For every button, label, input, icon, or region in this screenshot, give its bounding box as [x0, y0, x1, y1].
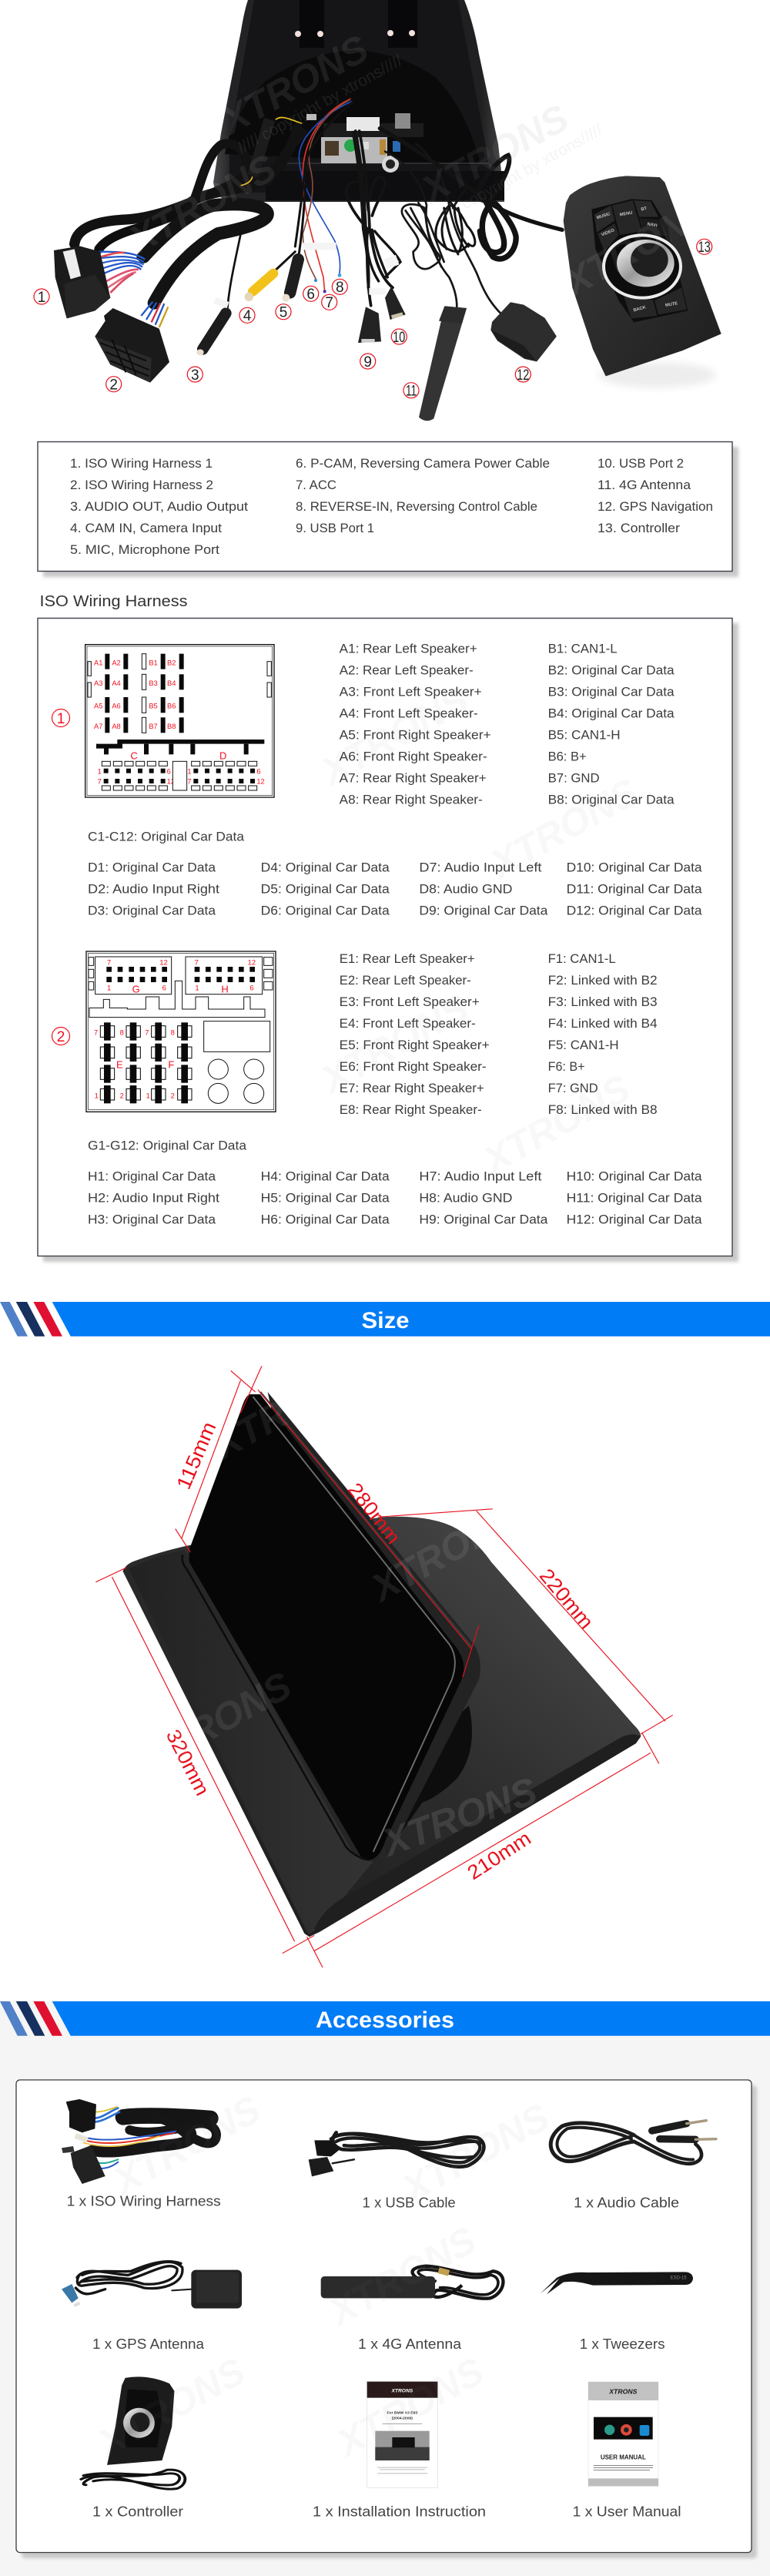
item: GPS antenna: [62, 2262, 242, 2352]
item: ISO wiring harness: [62, 2099, 221, 2209]
antennas, controller (right half): [380, 129, 721, 421]
diagram: connector 1 pinout: B6: [167, 702, 176, 709]
label: ISO wiring harness: 1 x ISO Wiring Harness: [67, 2194, 221, 2209]
pin list: D1-D12: D2: Audio Input Right: [88, 881, 219, 897]
diagram: connector 1 pinout: B7: [149, 723, 158, 730]
watermarks on pin panel: [313, 678, 645, 1183]
colored wires connector 2: [141, 302, 168, 327]
diagram: connector 2 pinout: 7: [145, 1028, 149, 1036]
panel: numbered parts list: [38, 442, 738, 577]
diagram: connector 2 pinout: 7: [94, 1028, 98, 1036]
pin list: D1-D12: D8: Audio GND: [419, 881, 512, 897]
pin list: H1-H12: H10: Original Car Data: [567, 1169, 702, 1183]
pin list: E1-E8: E7: Rear Right Speaker+: [340, 1081, 484, 1095]
pin list: G1-G12: G1-G12: Original Car Data: [88, 1139, 247, 1152]
pin list: F1-F8: [548, 951, 658, 1117]
panel: accessories: [16, 2080, 757, 2558]
watermarks on product photo: XTRONS: [120, 146, 283, 263]
pin list: F1-F8: F8: Linked with B8: [548, 1102, 658, 1117]
pin list: H1-H12: H2: Audio Input Right: [88, 1191, 219, 1206]
list column 2: 7. ACC: [296, 478, 336, 492]
size photo watermarks: [136, 1352, 543, 1865]
diagram: connector 1 pinout: B1: [149, 659, 158, 666]
diagram: connector 2 pinout: H: [221, 983, 229, 995]
item: installation instruction: [313, 2382, 486, 2520]
diagram: connector 1 pinout: 6: [167, 767, 171, 775]
label: user manual: 1 x User Manual: [573, 2504, 681, 2520]
pin list: C1-C12: C1-C12: Original Car Data: [88, 829, 245, 844]
watermarks on product photo: ///// copyright by xtrons/////: [235, 52, 405, 157]
pin list: D1-D12: D7: Audio Input Left: [419, 860, 542, 874]
list column 2: 9. USB Port 1: [296, 521, 374, 535]
stand and screen: [122, 1392, 641, 1937]
watermarks on accessories panel: XTRONS: [328, 2350, 491, 2466]
pin list: E1-E8: E5: Front Right Speaker+: [340, 1038, 490, 1052]
diagram: connector 1 pinout: A6: [112, 702, 121, 709]
pin list: D1-D12: D1: Original Car Data: [88, 860, 216, 874]
list column 3: 12. GPS Navigation: [598, 499, 713, 514]
pin list: H1-H12: H1: Original Car Data: [88, 1169, 216, 1183]
connector 1: [54, 246, 110, 318]
pin list: B1-B8: B7: GND: [548, 771, 600, 786]
list column 3: [598, 456, 713, 535]
pin list: F1-F8: F3: Linked with B3: [548, 995, 658, 1009]
pin list: B1-B8: B6: B+: [548, 750, 587, 764]
diagram: connector 2 pinout: [86, 951, 276, 1112]
pin list: A1-A8: A2: Rear Left Speaker-: [340, 663, 474, 678]
pin list: A1-A8: A7: Rear Right Speaker+: [340, 771, 487, 786]
callout: connector 2: [52, 1028, 69, 1045]
item: 4G antenna: [321, 2266, 503, 2352]
pin list: B1-B8: B1: CAN1-L: [548, 642, 618, 656]
item: user manual: XTRONS: [608, 2388, 638, 2396]
pin list: A1-A8: A3: Front Left Speaker+: [340, 685, 482, 699]
diagram: connector 1 pinout: B3: [149, 679, 158, 687]
watermarks on product photo: [120, 15, 718, 305]
pin list: D1-D12: D11: Original Car Data: [567, 881, 702, 897]
diagram: connector 1 pinout: B4: [167, 679, 176, 687]
watermarks on accessories panel: XTRONS: [393, 2095, 557, 2212]
pin list: H1-H12: H5: Original Car Data: [261, 1191, 390, 1206]
list column 2: [296, 456, 550, 535]
number labels: 5: [280, 305, 287, 320]
pin list: F1-F8: F1: CAN1-L: [548, 951, 616, 966]
pin list: B1-B8: B2: Original Car Data: [548, 663, 675, 678]
USB cables: [346, 131, 400, 306]
pin list: B1-B8: B8: Original Car Data: [548, 793, 675, 807]
number labels: [38, 240, 711, 399]
list column 2: 8. REVERSE-IN, Reversing Control Cable: [296, 499, 537, 514]
diagram: connector 1 pinout: B8: [167, 723, 176, 730]
number labels: 1: [38, 290, 45, 306]
watermarks on product photo: ///// copyright by xtrons/////: [435, 121, 605, 226]
item: user manual: [573, 2382, 681, 2520]
pin list: H1-H12: H9: Original Car Data: [419, 1213, 548, 1227]
diagram: connector 2 pinout: 8: [171, 1028, 175, 1036]
watermarks on accessories panel: XTRONS: [89, 2350, 253, 2466]
section banner: Size: Size: [362, 1308, 410, 1333]
page background: accessories light-gray section: [0, 2001, 770, 2576]
pin list: E1-E8: E8: Rear Right Speaker-: [340, 1102, 482, 1117]
diagram: connector 1 pinout: C: [130, 750, 138, 762]
watermarks on accessories panel: [89, 2088, 557, 2466]
pin list: E1-E8: E3: Front Left Speaker+: [340, 995, 480, 1009]
pin list: D1-D12: D12: Original Car Data: [567, 904, 702, 918]
diagram: connector 2 pinout: 1: [195, 984, 199, 992]
pin list: B1-B8: [548, 642, 675, 807]
number labels: 8: [336, 280, 344, 296]
antennas, controller (right half): BACK: [633, 305, 647, 313]
pin list: A1-A8: A5: Front Right Speaker+: [340, 728, 491, 743]
head unit back: [213, 0, 504, 202]
size photo watermarks: XTRONS: [375, 1769, 543, 1865]
label: audio cable: 1 x Audio Cable: [574, 2195, 679, 2211]
diagram: connector 2 pinout: 1: [146, 1092, 150, 1100]
size photo watermarks: XTRONS: [136, 1664, 299, 1780]
pin list: D1-D12: D9: Original Car Data: [419, 904, 548, 918]
label: 4G antenna: 1 x 4G Antenna: [358, 2336, 462, 2352]
pin list: A1-A8: A1: Rear Left Speaker+: [340, 642, 477, 656]
diagram: connector 1 pinout: 1: [98, 767, 102, 775]
list column 3: 11. 4G Antenna: [598, 478, 691, 492]
diagram: connector 2 pinout: E: [116, 1059, 123, 1071]
item: installation instruction: XTRONS: [390, 2389, 413, 2394]
audio jack: [203, 231, 241, 349]
controller body: [564, 176, 721, 376]
list column 3: 13. Controller: [598, 521, 680, 535]
pin list: E1-E8: E1: Rear Left Speaker+: [340, 951, 475, 966]
item: tweezers: ESD-15: [671, 2276, 687, 2281]
diagram: connector 1 pinout: A3: [94, 679, 102, 687]
pin list: E1-E8: E2: Rear Left Speaker-: [340, 973, 471, 988]
diagram: connector 1 pinout: A7: [94, 723, 102, 730]
dimension labels: 210mm: [463, 1826, 535, 1884]
section banner: Size: [0, 1302, 770, 1337]
dimension labels: 115mm: [172, 1418, 220, 1493]
pin list: B1-B8: B3: Original Car Data: [548, 685, 675, 699]
pin list: B1-B8: B4: Original Car Data: [548, 706, 675, 721]
dimension labels: 320mm: [162, 1726, 214, 1800]
pin list: F1-F8: F7: GND: [548, 1081, 598, 1095]
list column 1: 1. ISO Wiring Harness 1: [70, 456, 213, 471]
pin list: A1-A8: A8: Rear Right Speaker-: [340, 793, 483, 807]
watermarks on accessories panel: XTRONS: [105, 2088, 268, 2204]
section banner: Accessories: [0, 2001, 770, 2036]
diagram: connector 2 pinout: 6: [249, 984, 254, 992]
watermarks on pin panel: XTRONS: [482, 770, 645, 887]
diagram: connector 1 pinout: 7: [187, 777, 192, 785]
list column 3: 10. USB Port 2: [598, 456, 684, 471]
diagram: connector 2 pinout: F: [168, 1059, 174, 1071]
item: USB cable: [309, 2132, 484, 2211]
list column 1: 3. AUDIO OUT, Audio Output: [70, 499, 248, 514]
dimension labels: 220mm: [535, 1564, 598, 1633]
diagram: connector 1 pinout: [85, 645, 274, 797]
number labels: 2: [109, 377, 118, 393]
diagram: connector 1 pinout: 12: [256, 777, 265, 785]
item: installation instruction: For BMW X3 E83: [387, 2410, 417, 2415]
antennas, controller (right half): NAVI: [647, 222, 658, 229]
diagram: connector 2 pinout: 2: [120, 1092, 124, 1100]
diagram: connector 2 pinout: 12: [248, 959, 256, 967]
pin list: F1-F8: F6: B+: [548, 1059, 585, 1074]
pin list: D1-D12: D6: Original Car Data: [261, 904, 390, 918]
diagram: connector 1 pinout: A8: [112, 723, 121, 730]
pin list: A1-A8: [340, 642, 491, 807]
label: USB cable: 1 x USB Cable: [363, 2195, 456, 2211]
pin list: H1-H12: H3: Original Car Data: [88, 1213, 216, 1227]
number labels: 9: [363, 354, 372, 371]
item: controller: [81, 2376, 185, 2520]
diagram: connector 1 pinout: A1: [94, 659, 102, 666]
harness, wires and connectors (left half): [54, 99, 406, 383]
number labels: 11: [406, 384, 417, 399]
pin list: H1-H12: H7: Audio Input Left: [419, 1169, 542, 1183]
heading: ISO Wiring Harness: ISO Wiring Harness: [40, 593, 188, 610]
item: installation instruction: (2004-2009): [392, 2417, 413, 2421]
number labels: 6: [306, 287, 315, 303]
pin list: D1-D12: D5: Original Car Data: [261, 881, 390, 897]
pin list: E1-E8: E6: Front Right Speaker-: [340, 1059, 487, 1074]
list column 2: 6. P-CAM, Reversing Camera Power Cable: [296, 456, 550, 471]
diagram: connector 1 pinout: B5: [149, 702, 158, 709]
diagram: connector 2 pinout: 8: [120, 1028, 124, 1036]
diagram: connector 2 pinout: 1: [95, 1092, 99, 1100]
pin list: A1-A8: A6: Front Right Speaker-: [340, 750, 487, 764]
diagram: connector 1 pinout: 1: [187, 767, 192, 775]
watermarks on pin panel: XTRONS: [474, 1067, 638, 1183]
size photo: stand with dimensions: [95, 1352, 673, 1967]
diagram: connector 1 pinout: 7: [98, 777, 102, 785]
watermarks on pin panel: XTRONS: [313, 986, 476, 1102]
pin list: H1-H12: H6: Original Car Data: [261, 1213, 390, 1227]
pin list: E1-E8: [340, 951, 490, 1117]
product photo: head unit and cables: [34, 0, 721, 421]
list column 1: [70, 456, 248, 557]
watermarks on product photo: XTRONS: [413, 96, 576, 213]
size photo watermarks: XTRONS: [363, 1494, 526, 1611]
number labels: 12: [517, 367, 529, 384]
diagram: connector 2 pinout: 2: [171, 1092, 175, 1100]
diagram: connector 1 pinout: A2: [112, 659, 121, 666]
diagram: connector 2 pinout: G: [132, 983, 140, 995]
antennas, controller (right half): VIDEO: [601, 228, 615, 237]
sleeved harness: [75, 117, 303, 303]
colored wires connector 1: [99, 252, 145, 293]
antennas, controller (right half): MUSIC: [596, 212, 611, 220]
diagram: connector 1 pinout: A5: [94, 702, 102, 709]
pin list: D1-D12: D4: Original Car Data: [261, 860, 390, 874]
item: audio cable: [551, 2121, 716, 2211]
diagram: connector 1 pinout: A4: [112, 679, 121, 687]
pin list: F1-F8: F4: Linked with B4: [548, 1016, 658, 1031]
watermarks on pin panel: XTRONS: [313, 678, 476, 794]
label: tweezers: 1 x Tweezers: [580, 2336, 665, 2352]
number callouts: [34, 239, 712, 398]
callout: connector 2: 2: [57, 1029, 65, 1045]
number labels: 7: [325, 295, 333, 311]
panel: ISO wiring harness pinouts: [38, 618, 738, 1262]
pin list: D1-D12: D3: Original Car Data: [88, 904, 216, 918]
callout: connector 1: 1: [57, 711, 65, 727]
watermarks on accessories panel: XTRONS: [320, 2219, 484, 2335]
diagram: connector 2 pinout: 12: [159, 959, 168, 967]
number labels: 3: [191, 367, 199, 384]
pin list: F1-F8: F5: CAN1-H: [548, 1038, 619, 1052]
size photo watermarks: XTRONS: [205, 1352, 368, 1468]
list column 1: 5. MIC, Microphone Port: [70, 542, 219, 557]
item: user manual: USER MANUAL: [601, 2454, 646, 2461]
pin list: B1-B8: B5: CAN1-H: [548, 728, 621, 743]
number labels: 13: [698, 240, 711, 256]
section banner: Accessories: Accessories: [316, 2007, 454, 2033]
dimension labels: 280mm: [343, 1478, 405, 1548]
pin list: D1-D12: [88, 860, 702, 918]
diagram: connector 2 pinout: 7: [107, 959, 111, 967]
pin list: H1-H12: [88, 1169, 702, 1227]
label: installation instruction: 1 x Installation Instruction: [313, 2504, 486, 2520]
thin wires: [253, 99, 352, 293]
antennas, controller (right half): MENU: [619, 211, 633, 217]
callout: connector 1: [52, 709, 69, 727]
pin list: H1-H12: H4: Original Car Data: [261, 1169, 390, 1183]
pin list: D1-D12: D10: Original Car Data: [567, 860, 702, 874]
pin list: H1-H12: H11: Original Car Data: [567, 1191, 702, 1206]
pin list: H1-H12: H8: Audio GND: [419, 1191, 512, 1206]
dimension labels: [162, 1418, 598, 1884]
antennas, controller (right half): MUTE: [665, 301, 678, 308]
pin list: H1-H12: H12: Original Car Data: [567, 1213, 702, 1227]
number labels: 10: [393, 330, 405, 346]
list column 1: 2. ISO Wiring Harness 2: [70, 478, 213, 492]
diagram: connector 1 pinout: 6: [256, 767, 261, 775]
watermarks on product photo: XTRONS: [213, 27, 376, 143]
diagram: connector 2 pinout: 6: [162, 984, 166, 992]
diagram: connector 2 pinout: 1: [107, 984, 111, 992]
label: GPS antenna: 1 x GPS Antenna: [92, 2336, 205, 2352]
dimension lines: [95, 1366, 673, 1967]
item: tweezers: [541, 2272, 693, 2352]
connector 2: [95, 308, 169, 383]
pin list: A1-A8: A4: Front Left Speaker-: [340, 706, 478, 721]
diagram: connector 2 pinout: 7: [195, 959, 199, 967]
antennas, controller (right half): BT: [641, 206, 648, 213]
diagram: connector 1 pinout: D: [219, 750, 226, 762]
watermarks on product photo: XTRONS: [555, 189, 718, 305]
list column 1: 4. CAM IN, Camera Input: [70, 521, 222, 535]
number labels: 4: [243, 308, 252, 324]
pin list: E1-E8: E4: Front Left Speaker-: [340, 1016, 476, 1031]
diagram: connector 1 pinout: B2: [167, 659, 176, 666]
label: controller: 1 x Controller: [92, 2504, 183, 2520]
pin list: F1-F8: F2: Linked with B2: [548, 973, 658, 988]
diagram: connector 1 pinout: 12: [167, 777, 175, 785]
